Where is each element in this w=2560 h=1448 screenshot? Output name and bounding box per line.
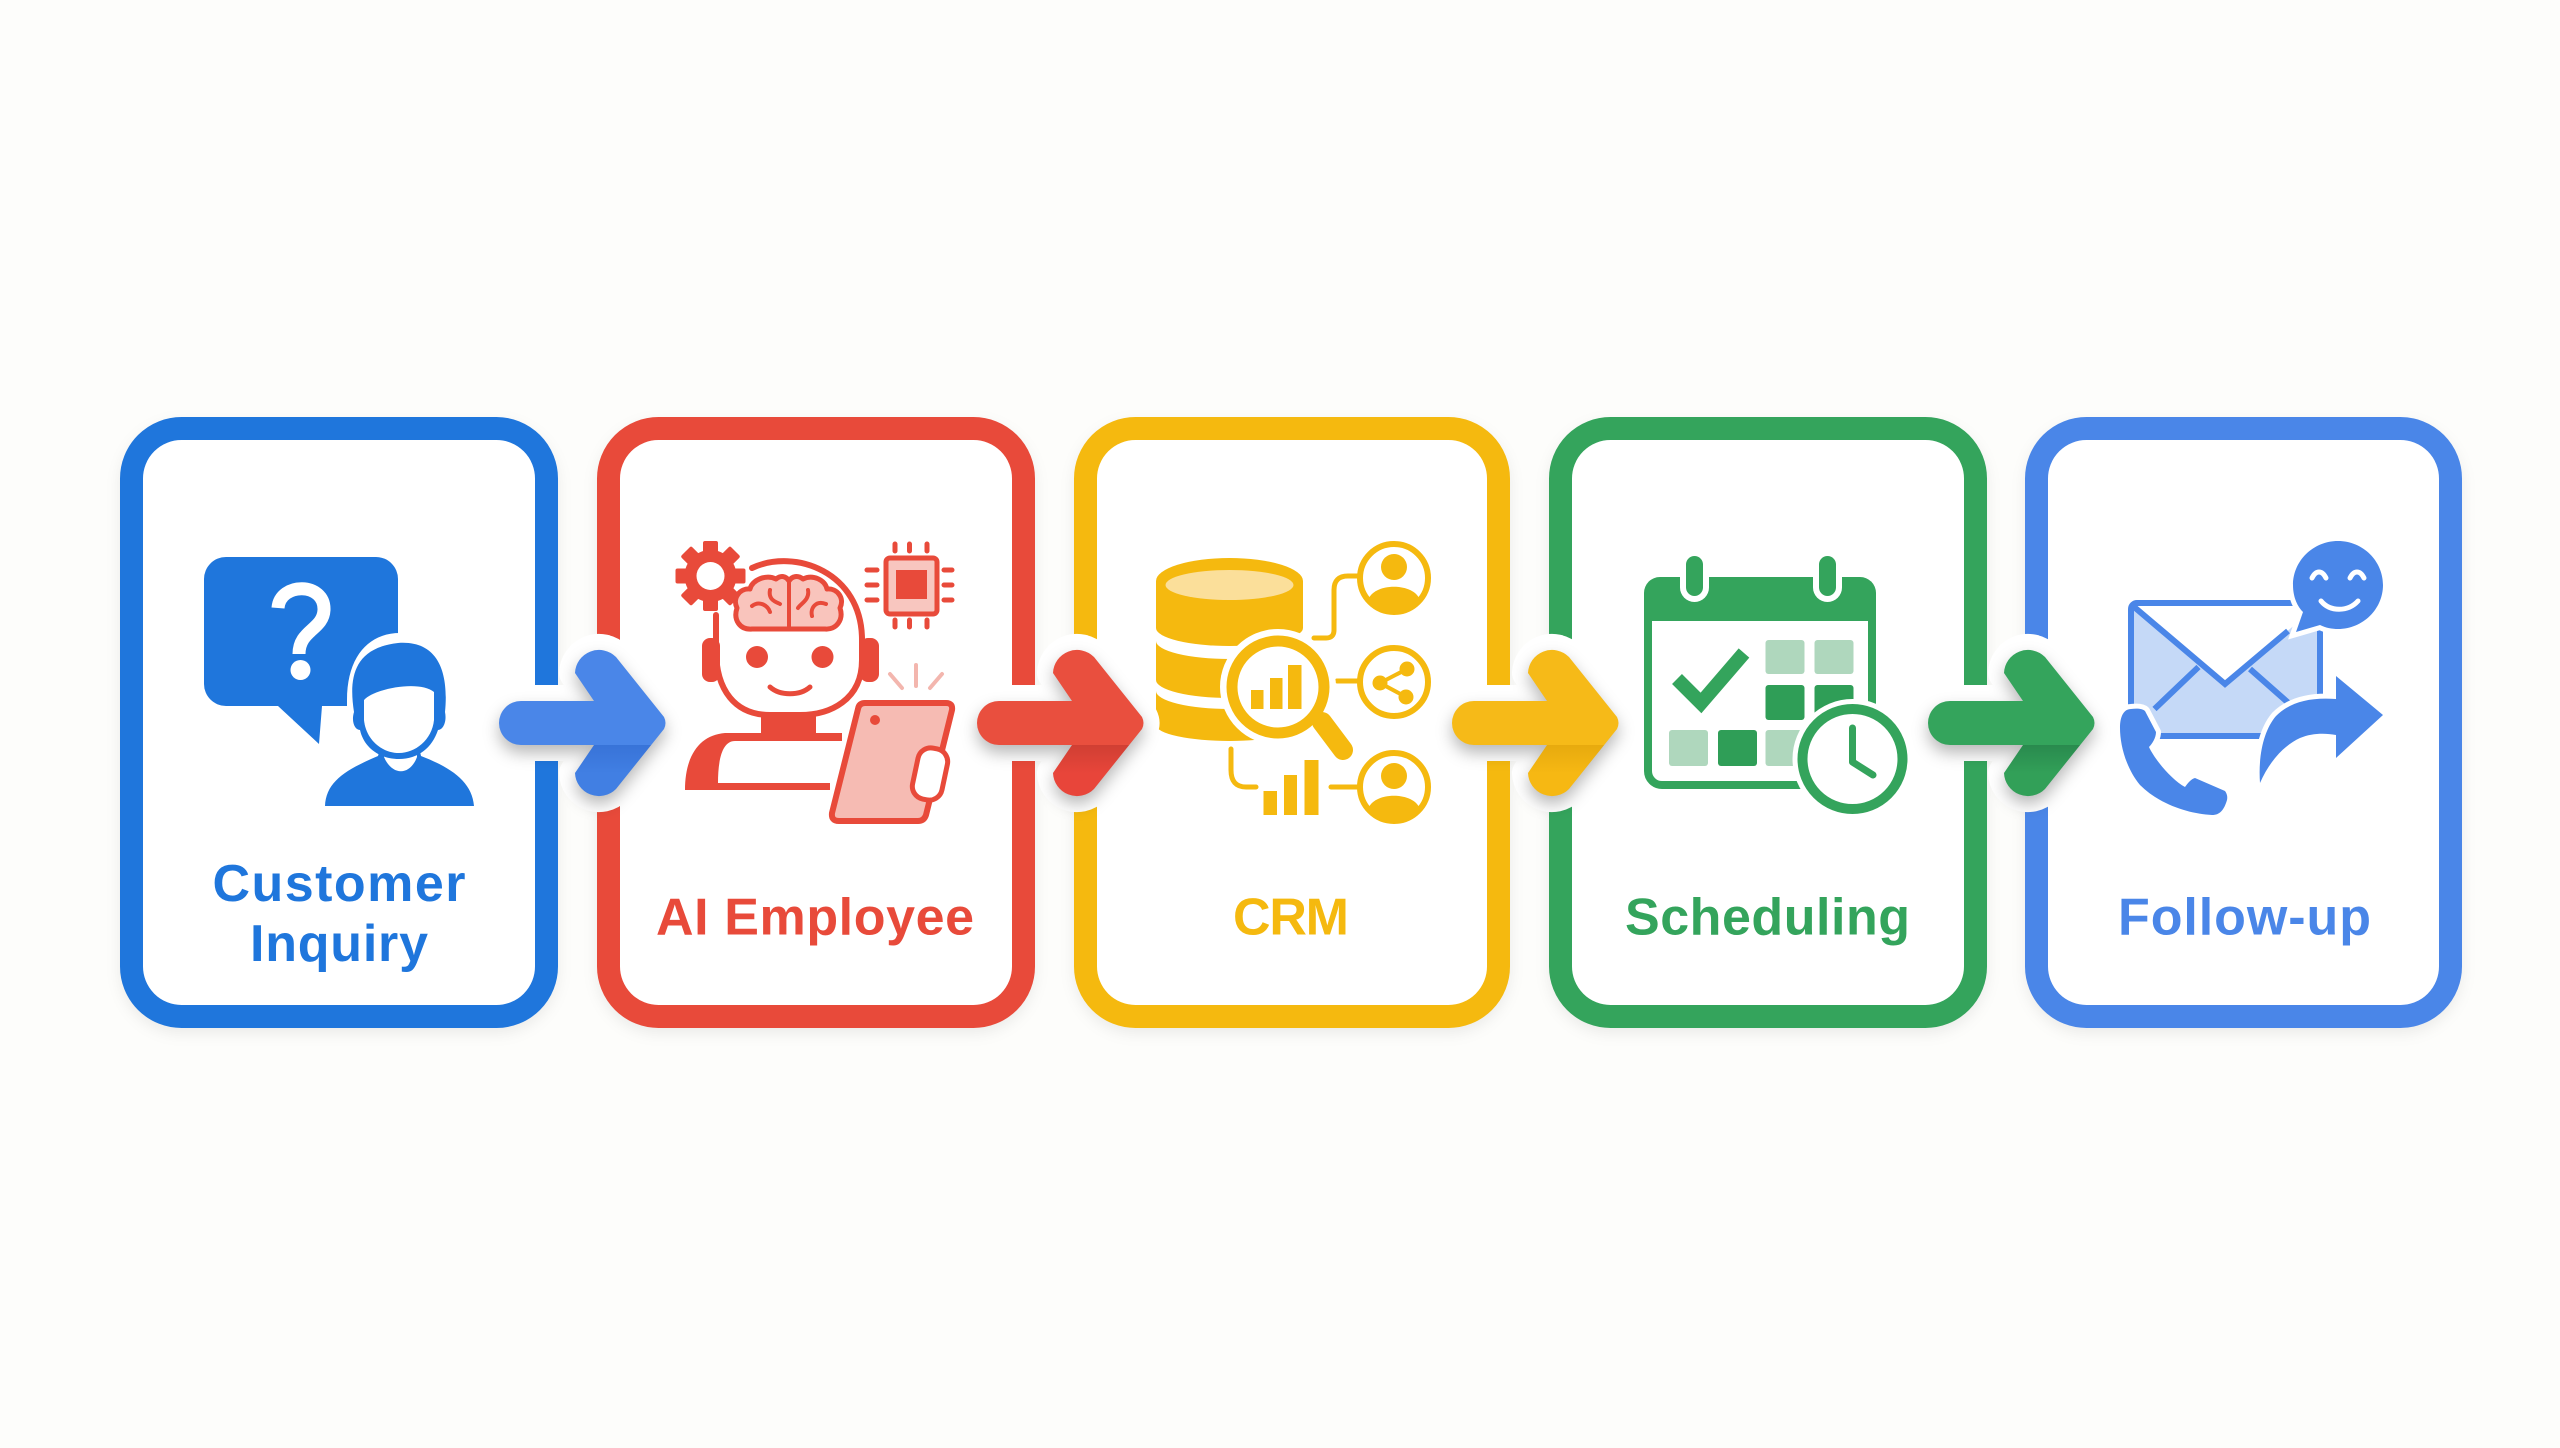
binder rings: [1680, 550, 1842, 602]
notification sparks: [890, 665, 942, 688]
gear: [676, 541, 746, 611]
envelope: [2131, 603, 2320, 736]
chip: [867, 544, 952, 627]
small bars: [1264, 760, 1318, 815]
clock: [1792, 699, 1912, 819]
label: follow-up: Follow-up: [2118, 888, 2371, 946]
arrow: scheduling to follow-up: [1928, 650, 2094, 804]
label: customer inquiry: Customer: [212, 855, 466, 913]
connectors: [1231, 576, 1361, 787]
arrow: ai employee to crm: [977, 650, 1144, 804]
magnifier: [1220, 629, 1343, 750]
contact circle top: [1360, 544, 1428, 613]
speech bubble with smile: [2293, 541, 2383, 632]
arrow: inquiry to ai employee: [499, 650, 666, 804]
date grid: [1669, 640, 1854, 766]
shoulders: [685, 733, 842, 790]
card frame: follow-up: [2036, 428, 2450, 1016]
card frame: ai employee: [608, 428, 1024, 1016]
smile: [770, 687, 810, 694]
ear pieces: [702, 638, 720, 682]
panel: customer inquiry: [132, 428, 546, 1022]
robot head: [716, 561, 862, 715]
label line two: Inquiry: [250, 915, 428, 973]
label: crm: CRM: [1233, 888, 1349, 946]
panel: scheduling: [1560, 428, 1976, 1022]
brain: [735, 577, 842, 629]
icon: envelope, phone, smile and reply: [2120, 541, 2383, 815]
card frame: scheduling: [1560, 428, 1976, 1016]
neck: [761, 714, 816, 734]
panel: ai employee: [608, 428, 1024, 1022]
eyes: [746, 646, 834, 668]
label: ai employee: AI Employee: [656, 888, 974, 946]
card frame: customer inquiry: [132, 428, 546, 1016]
reply arrow: [2260, 676, 2383, 783]
phone handset: [2120, 709, 2227, 815]
icon: robot with brain, gear, chip and tablet: [676, 541, 952, 821]
contact circle bottom: [1360, 753, 1428, 822]
panel: follow-up: [2036, 428, 2450, 1022]
icon: calendar and clock: [1644, 550, 1912, 819]
arrow: crm to scheduling: [1452, 650, 1618, 804]
share circle: [1360, 648, 1428, 716]
icon: question bubble and person: [204, 557, 474, 806]
database: [1156, 558, 1303, 741]
calendar header: [1644, 577, 1876, 621]
card frame: crm: [1086, 428, 1498, 1016]
label: scheduling: Scheduling: [1625, 888, 1910, 946]
ear piece right: [860, 638, 879, 682]
icon: database, magnifier and contacts: [1156, 544, 1428, 822]
tablet: [832, 703, 952, 821]
check mark: [1677, 653, 1744, 703]
panel: crm: [1086, 428, 1498, 1022]
